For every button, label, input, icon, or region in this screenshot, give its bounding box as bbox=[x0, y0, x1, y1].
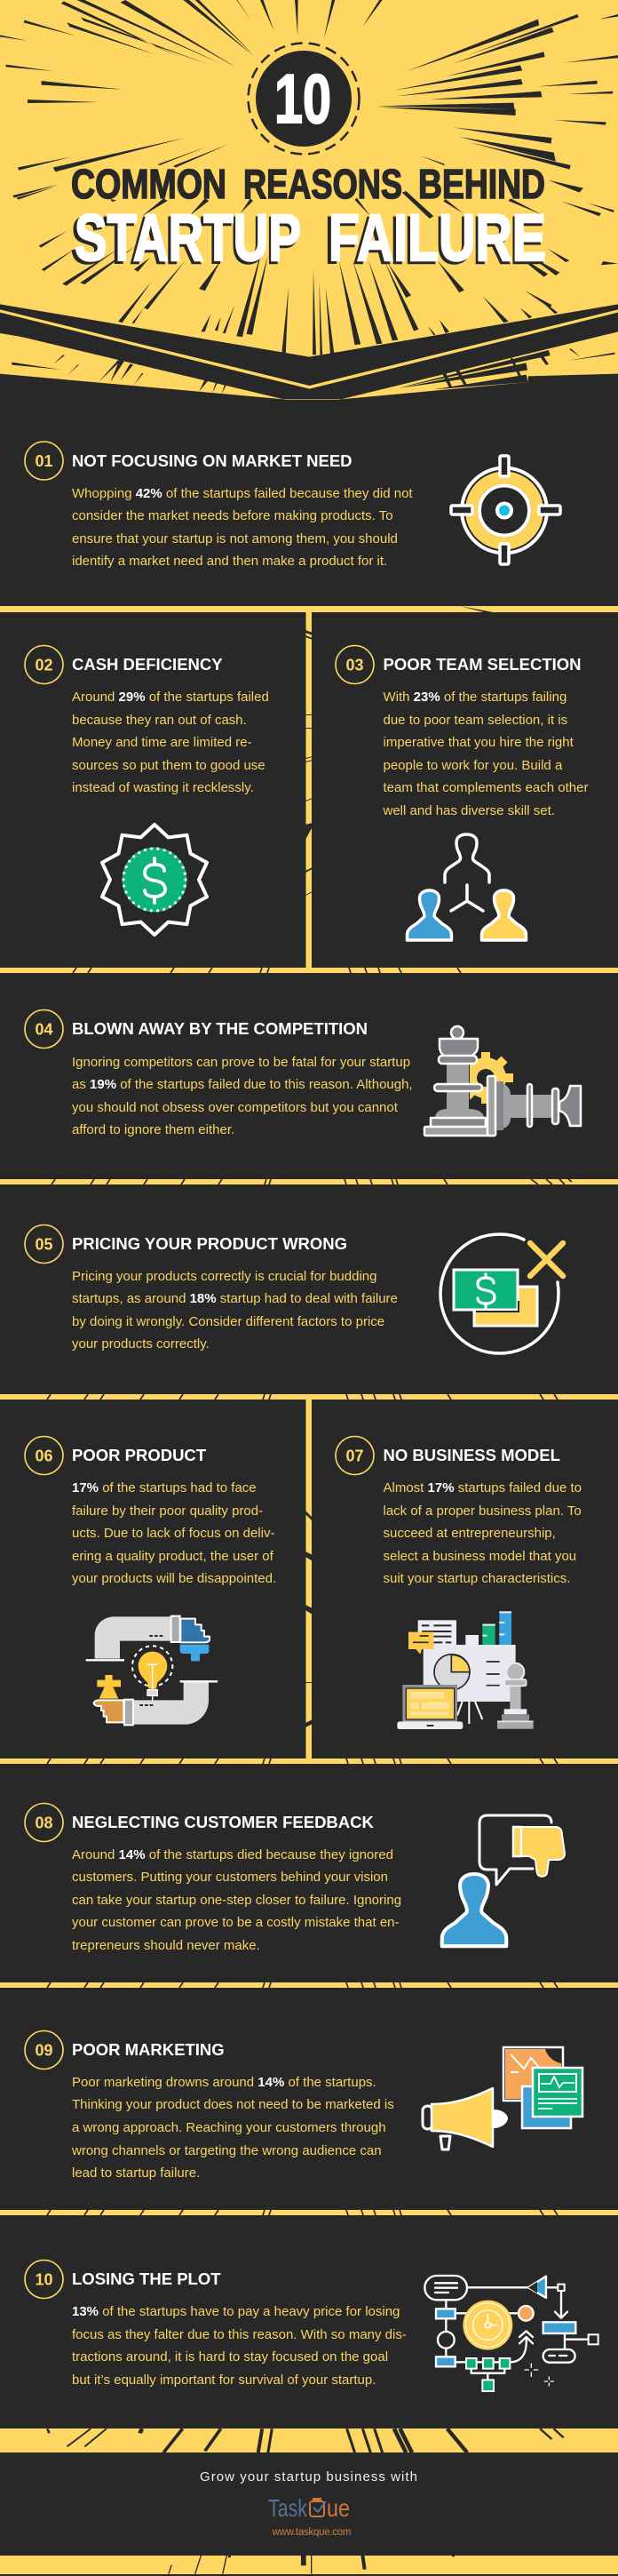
section 07 bbox=[336, 1436, 582, 1729]
number badge 10 bbox=[25, 2261, 63, 2298]
section 06 bbox=[25, 1436, 276, 1725]
body 07: Almost 17% startups failed due to bbox=[384, 1480, 582, 1495]
title line 1: REASONS bbox=[243, 161, 402, 207]
footer band bottom bbox=[0, 2556, 618, 2574]
heading 01: NOT FOCUSING ON MARKET NEED bbox=[72, 451, 353, 470]
body 05: startups, as around 18% startup had to deal with failure bbox=[72, 1291, 398, 1306]
body 03: people to work for you. Build a bbox=[384, 758, 563, 773]
body 07: select a business model that you bbox=[384, 1549, 576, 1564]
body 06: ering a quality product, the user of bbox=[72, 1549, 274, 1564]
logo: TaskQue: ue bbox=[327, 2494, 350, 2522]
chevron band bbox=[0, 304, 618, 411]
body 10: 13% of the startups have to pay a heavy price for losing bbox=[72, 2304, 400, 2319]
logo: TaskQue: Task bbox=[268, 2494, 308, 2522]
body 01: ensure that your startup is not among them, you should bbox=[72, 531, 398, 546]
divider under section 04 bbox=[0, 1179, 618, 1184]
heading 05: PRICING YOUR PRODUCT WRONG bbox=[72, 1234, 347, 1253]
burst rays bbox=[0, 0, 618, 355]
body 02: because they ran out of cash. bbox=[72, 713, 247, 728]
heading 09: POOR MARKETING bbox=[72, 2040, 225, 2059]
body 05: your products correctly. bbox=[72, 1336, 210, 1352]
title line 2: STARTUP bbox=[75, 201, 301, 275]
section 04 bbox=[25, 1009, 581, 1137]
footer band top bbox=[0, 2428, 618, 2452]
body 08: trepreneurs should never make. bbox=[72, 1938, 260, 1953]
divider above sections 06 and 07 bbox=[0, 1394, 618, 1400]
body 07: suit your startup characteristics. bbox=[384, 1571, 570, 1586]
body 09 bbox=[71, 2075, 394, 2181]
number badge 07 bbox=[336, 1436, 374, 1475]
badge: number 10 bbox=[249, 43, 359, 155]
body 06: your products will be disappointed. bbox=[72, 1571, 276, 1586]
number badge 07: 07 bbox=[345, 1447, 364, 1464]
number badge 05: 05 bbox=[35, 1235, 53, 1253]
body 01: consider the market needs before making products. To bbox=[72, 508, 393, 523]
body 08: customers. Putting your customers behind your vision bbox=[72, 1870, 388, 1885]
number badge 01: 01 bbox=[35, 452, 53, 470]
section 09 bbox=[25, 2031, 582, 2181]
body 01 bbox=[72, 486, 413, 569]
body 07 bbox=[384, 1480, 582, 1586]
section 02 bbox=[25, 645, 269, 935]
body 07: lack of a proper business plan. To bbox=[384, 1503, 582, 1519]
body 03: due to poor team selection, it is bbox=[384, 713, 567, 728]
icon: chess pieces and gear bbox=[424, 1026, 581, 1136]
body 10: tractions around, it is hard to stay focused on the goal bbox=[72, 2349, 388, 2365]
body 02: instead of wasting it recklessly. bbox=[72, 780, 254, 795]
body 10: but it’s equally important for survival of your startup. bbox=[72, 2373, 376, 2388]
number badge 05 bbox=[25, 1224, 63, 1264]
heading 03: POOR TEAM SELECTION bbox=[384, 655, 582, 674]
body 04 bbox=[72, 1055, 413, 1137]
divider under sections 02 and 03 bbox=[0, 968, 618, 973]
body 03: With 23% of the startups failing bbox=[384, 690, 566, 705]
section 08 bbox=[25, 1804, 565, 1953]
vertical divider 06/07 bbox=[305, 1400, 313, 1759]
number badge 09: 09 bbox=[35, 2042, 53, 2060]
body 04: Ignoring competitors can prove to be fatal for your startup bbox=[72, 1055, 410, 1070]
body 04: as 19% of the startups failed due to this reason. Although, bbox=[72, 1077, 413, 1092]
body 06: ucts. Due to lack of focus on deliv- bbox=[72, 1526, 274, 1541]
number badge 04 bbox=[25, 1009, 63, 1049]
body 03: imperative that you hire the right bbox=[384, 735, 574, 750]
heading 07: NO BUSINESS MODEL bbox=[384, 1446, 560, 1464]
title line 2 shadow: FAILURE bbox=[325, 203, 544, 277]
body 03: team that complements each other bbox=[384, 780, 588, 795]
body 01: Whopping 42% of the startups failed because they did not bbox=[72, 486, 413, 501]
body 07: succeed at entrepreneurship, bbox=[384, 1526, 556, 1541]
section 01 bbox=[25, 442, 560, 569]
title line 2: FAILURE bbox=[329, 201, 546, 275]
title line 2 shadow: STARTUP bbox=[71, 203, 299, 277]
icon: dollar badge bbox=[102, 825, 207, 935]
icon: team bbox=[407, 834, 526, 940]
icon: pipes and light bulb bbox=[86, 1616, 218, 1725]
number badge 08 bbox=[25, 1804, 63, 1841]
body 09: a wrong approach. Reaching your customers through bbox=[72, 2120, 386, 2135]
body 09: wrong channels or targeting the wrong audience can bbox=[71, 2143, 382, 2158]
horizontal rook bbox=[487, 1076, 581, 1136]
logo: TaskQue bbox=[268, 2494, 350, 2522]
body 08: Around 14% of the startups died because they ignored bbox=[72, 1847, 393, 1862]
body 05 bbox=[72, 1269, 398, 1352]
vertical king bbox=[424, 1026, 495, 1136]
icon: target bbox=[451, 456, 560, 564]
vertical divider 02/03 bbox=[305, 612, 313, 968]
body 08 bbox=[72, 1847, 401, 1953]
body 02: Money and time are limited re- bbox=[72, 735, 252, 750]
gear bbox=[453, 1049, 513, 1111]
body 06 bbox=[72, 1480, 276, 1586]
badge: number 10: 10 bbox=[274, 60, 331, 138]
heading 04: BLOWN AWAY BY THE COMPETITION bbox=[72, 1019, 368, 1038]
number badge 01 bbox=[25, 442, 63, 480]
icon: megaphone and reports bbox=[423, 2047, 582, 2149]
number badge 02 bbox=[25, 645, 63, 684]
body 05: by doing it wrongly. Consider different factors to price bbox=[72, 1314, 384, 1329]
number badge 08: 08 bbox=[35, 1814, 53, 1832]
body 09: lead to startup failure. bbox=[72, 2165, 200, 2181]
header panel bbox=[0, 0, 618, 411]
body 04: afford to ignore them either. bbox=[72, 1122, 234, 1137]
body 03: well and has diverse skill set. bbox=[382, 803, 555, 818]
body 05: Pricing your products correctly is crucial for budding bbox=[72, 1269, 376, 1284]
title line 1: BEHIND bbox=[418, 161, 545, 207]
divider under section 08 bbox=[0, 1982, 618, 1988]
icon: business plan board bbox=[397, 1611, 534, 1729]
title line 2 bbox=[75, 201, 546, 275]
body 09: Poor marketing drowns around 14% of the startups. bbox=[72, 2075, 376, 2090]
body 06: failure by their poor quality prod- bbox=[72, 1503, 263, 1519]
body 02: Around 29% of the startups failed bbox=[72, 690, 269, 705]
body 04: you should not obsess over competitors but you cannot bbox=[72, 1100, 399, 1115]
body 08: your customer can prove to be a costly mistake that en- bbox=[72, 1915, 400, 1930]
heading 02: CASH DEFICIENCY bbox=[72, 655, 223, 674]
footer url: www.taskque.com bbox=[272, 2527, 352, 2538]
heading 06: POOR PRODUCT bbox=[72, 1446, 207, 1464]
number badge 06 bbox=[25, 1436, 63, 1475]
heading 08: NEGLECTING CUSTOMER FEEDBACK bbox=[72, 1813, 375, 1831]
icon: process flowchart bbox=[424, 2276, 598, 2391]
body 02: sources so put them to good use bbox=[72, 758, 265, 773]
body 10 bbox=[72, 2304, 407, 2388]
divider under section 01 bbox=[0, 606, 618, 612]
heading 10: LOSING THE PLOT bbox=[72, 2269, 221, 2288]
number badge 04: 04 bbox=[35, 1020, 53, 1038]
section 05 bbox=[25, 1224, 563, 1353]
number badge 03: 03 bbox=[345, 656, 364, 674]
section 10 bbox=[25, 2261, 598, 2391]
section 03 bbox=[336, 645, 588, 940]
number badge 06: 06 bbox=[35, 1447, 53, 1464]
body 01: identify a market need and then make a product for it. bbox=[72, 554, 387, 569]
number badge 10: 10 bbox=[35, 2271, 53, 2289]
number badge 03 bbox=[336, 645, 374, 684]
number badge 02: 02 bbox=[35, 656, 53, 674]
body 02 bbox=[72, 690, 269, 795]
divider under sections 06 and 07 bbox=[0, 1759, 618, 1764]
number badge 09 bbox=[25, 2031, 63, 2069]
divider under section 09 bbox=[0, 2210, 618, 2215]
body 10: focus as they falter due to this reason. With so many dis- bbox=[72, 2327, 407, 2342]
body 06: 17% of the startups had to face bbox=[72, 1480, 257, 1495]
body 09: Thinking your product does not need to be marketed is bbox=[72, 2097, 394, 2112]
title line 1: COMMON bbox=[71, 161, 226, 207]
footer callout: Grow your startup business with bbox=[200, 2469, 417, 2484]
title line 2 shadow bbox=[71, 203, 544, 277]
body 03 bbox=[382, 690, 588, 818]
icon: wrong price bbox=[440, 1234, 563, 1353]
title line 1 bbox=[71, 161, 545, 207]
icon: customer with thumbs down bbox=[442, 1815, 565, 1946]
body 08: can take your startup one-step closer to failure. Ignoring bbox=[72, 1893, 401, 1908]
